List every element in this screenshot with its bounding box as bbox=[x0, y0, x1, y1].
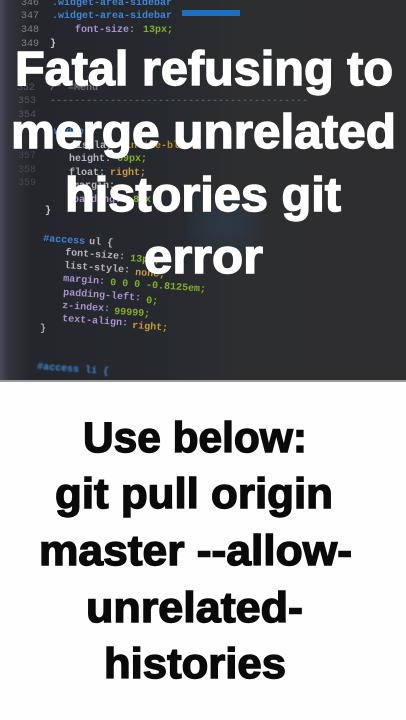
line numbers: 348 bbox=[21, 25, 39, 36]
code editor text: } bbox=[50, 38, 56, 50]
code editor text: #access bbox=[43, 234, 85, 248]
code editor text: .widget bbox=[48, 126, 90, 138]
line numbers: 349 bbox=[21, 39, 39, 50]
line numbers: 359 bbox=[18, 178, 36, 189]
code editor text: /* =Menu bbox=[50, 82, 98, 94]
line numbers: 357 bbox=[18, 151, 36, 162]
code editor text: .widget-area-sidebar bbox=[52, 10, 172, 22]
code editor text: ul { bbox=[89, 236, 114, 250]
code editor text: inline-block; bbox=[125, 140, 203, 152]
title: histories git bbox=[65, 169, 341, 222]
panel: dark code photo background bbox=[0, 0, 406, 382]
answer text: git pull origin bbox=[55, 470, 333, 518]
code editor text bbox=[17, 0, 308, 378]
answer text: master --allow- bbox=[39, 527, 352, 575]
answer text: histories bbox=[104, 640, 286, 688]
line numbers: 358 bbox=[18, 165, 36, 176]
title: merge unrelated bbox=[11, 106, 396, 159]
code editor text: #access li { bbox=[37, 361, 109, 378]
code editor text: 8px; bbox=[133, 195, 157, 206]
title: Fatal refusing to bbox=[15, 43, 393, 96]
title bbox=[11, 43, 396, 284]
code editor text: list-style: bbox=[64, 260, 130, 277]
code editor text: display: bbox=[70, 140, 118, 152]
answer text: unrelated- bbox=[86, 584, 303, 632]
answer text bbox=[39, 414, 352, 688]
code editor text: text-align: bbox=[62, 313, 128, 330]
code editor text: z-index: bbox=[62, 300, 110, 315]
code editor text: 99999; bbox=[114, 307, 150, 321]
code editor text: 0 0 0 -0.8125em; bbox=[110, 278, 206, 296]
code editor text: padding: bbox=[73, 194, 121, 206]
line numbers bbox=[17, 0, 39, 189]
code editor text: font-size: bbox=[65, 247, 125, 263]
code editor text: 69px; bbox=[117, 154, 147, 165]
code editor text: 0; bbox=[146, 296, 158, 308]
code editor text: margin: bbox=[63, 273, 105, 288]
code editor text: } bbox=[45, 205, 51, 217]
line numbers: 347 bbox=[21, 11, 39, 22]
title: error bbox=[144, 231, 263, 284]
code editor text: none; bbox=[135, 268, 165, 281]
code editor text: 13px; bbox=[143, 25, 173, 36]
code editor text: ------------------------------------------- bbox=[50, 96, 308, 107]
code editor text: } bbox=[40, 323, 46, 335]
panel: white answer area bbox=[0, 382, 406, 720]
code editor text: right; bbox=[132, 320, 168, 335]
code editor text: height: bbox=[69, 153, 111, 165]
line numbers: 354 bbox=[18, 110, 36, 121]
code editor text: margin: bbox=[73, 180, 115, 192]
code editor text: float: bbox=[69, 167, 105, 179]
line numbers: 352 bbox=[17, 83, 35, 94]
line numbers: 353 bbox=[18, 96, 36, 107]
answer text: Use below: bbox=[83, 414, 307, 462]
code editor text: padding-left: bbox=[63, 287, 141, 304]
code editor text: right; bbox=[110, 167, 146, 179]
code editor text: 13px; bbox=[130, 254, 160, 267]
code editor text: font-size: bbox=[75, 24, 135, 36]
